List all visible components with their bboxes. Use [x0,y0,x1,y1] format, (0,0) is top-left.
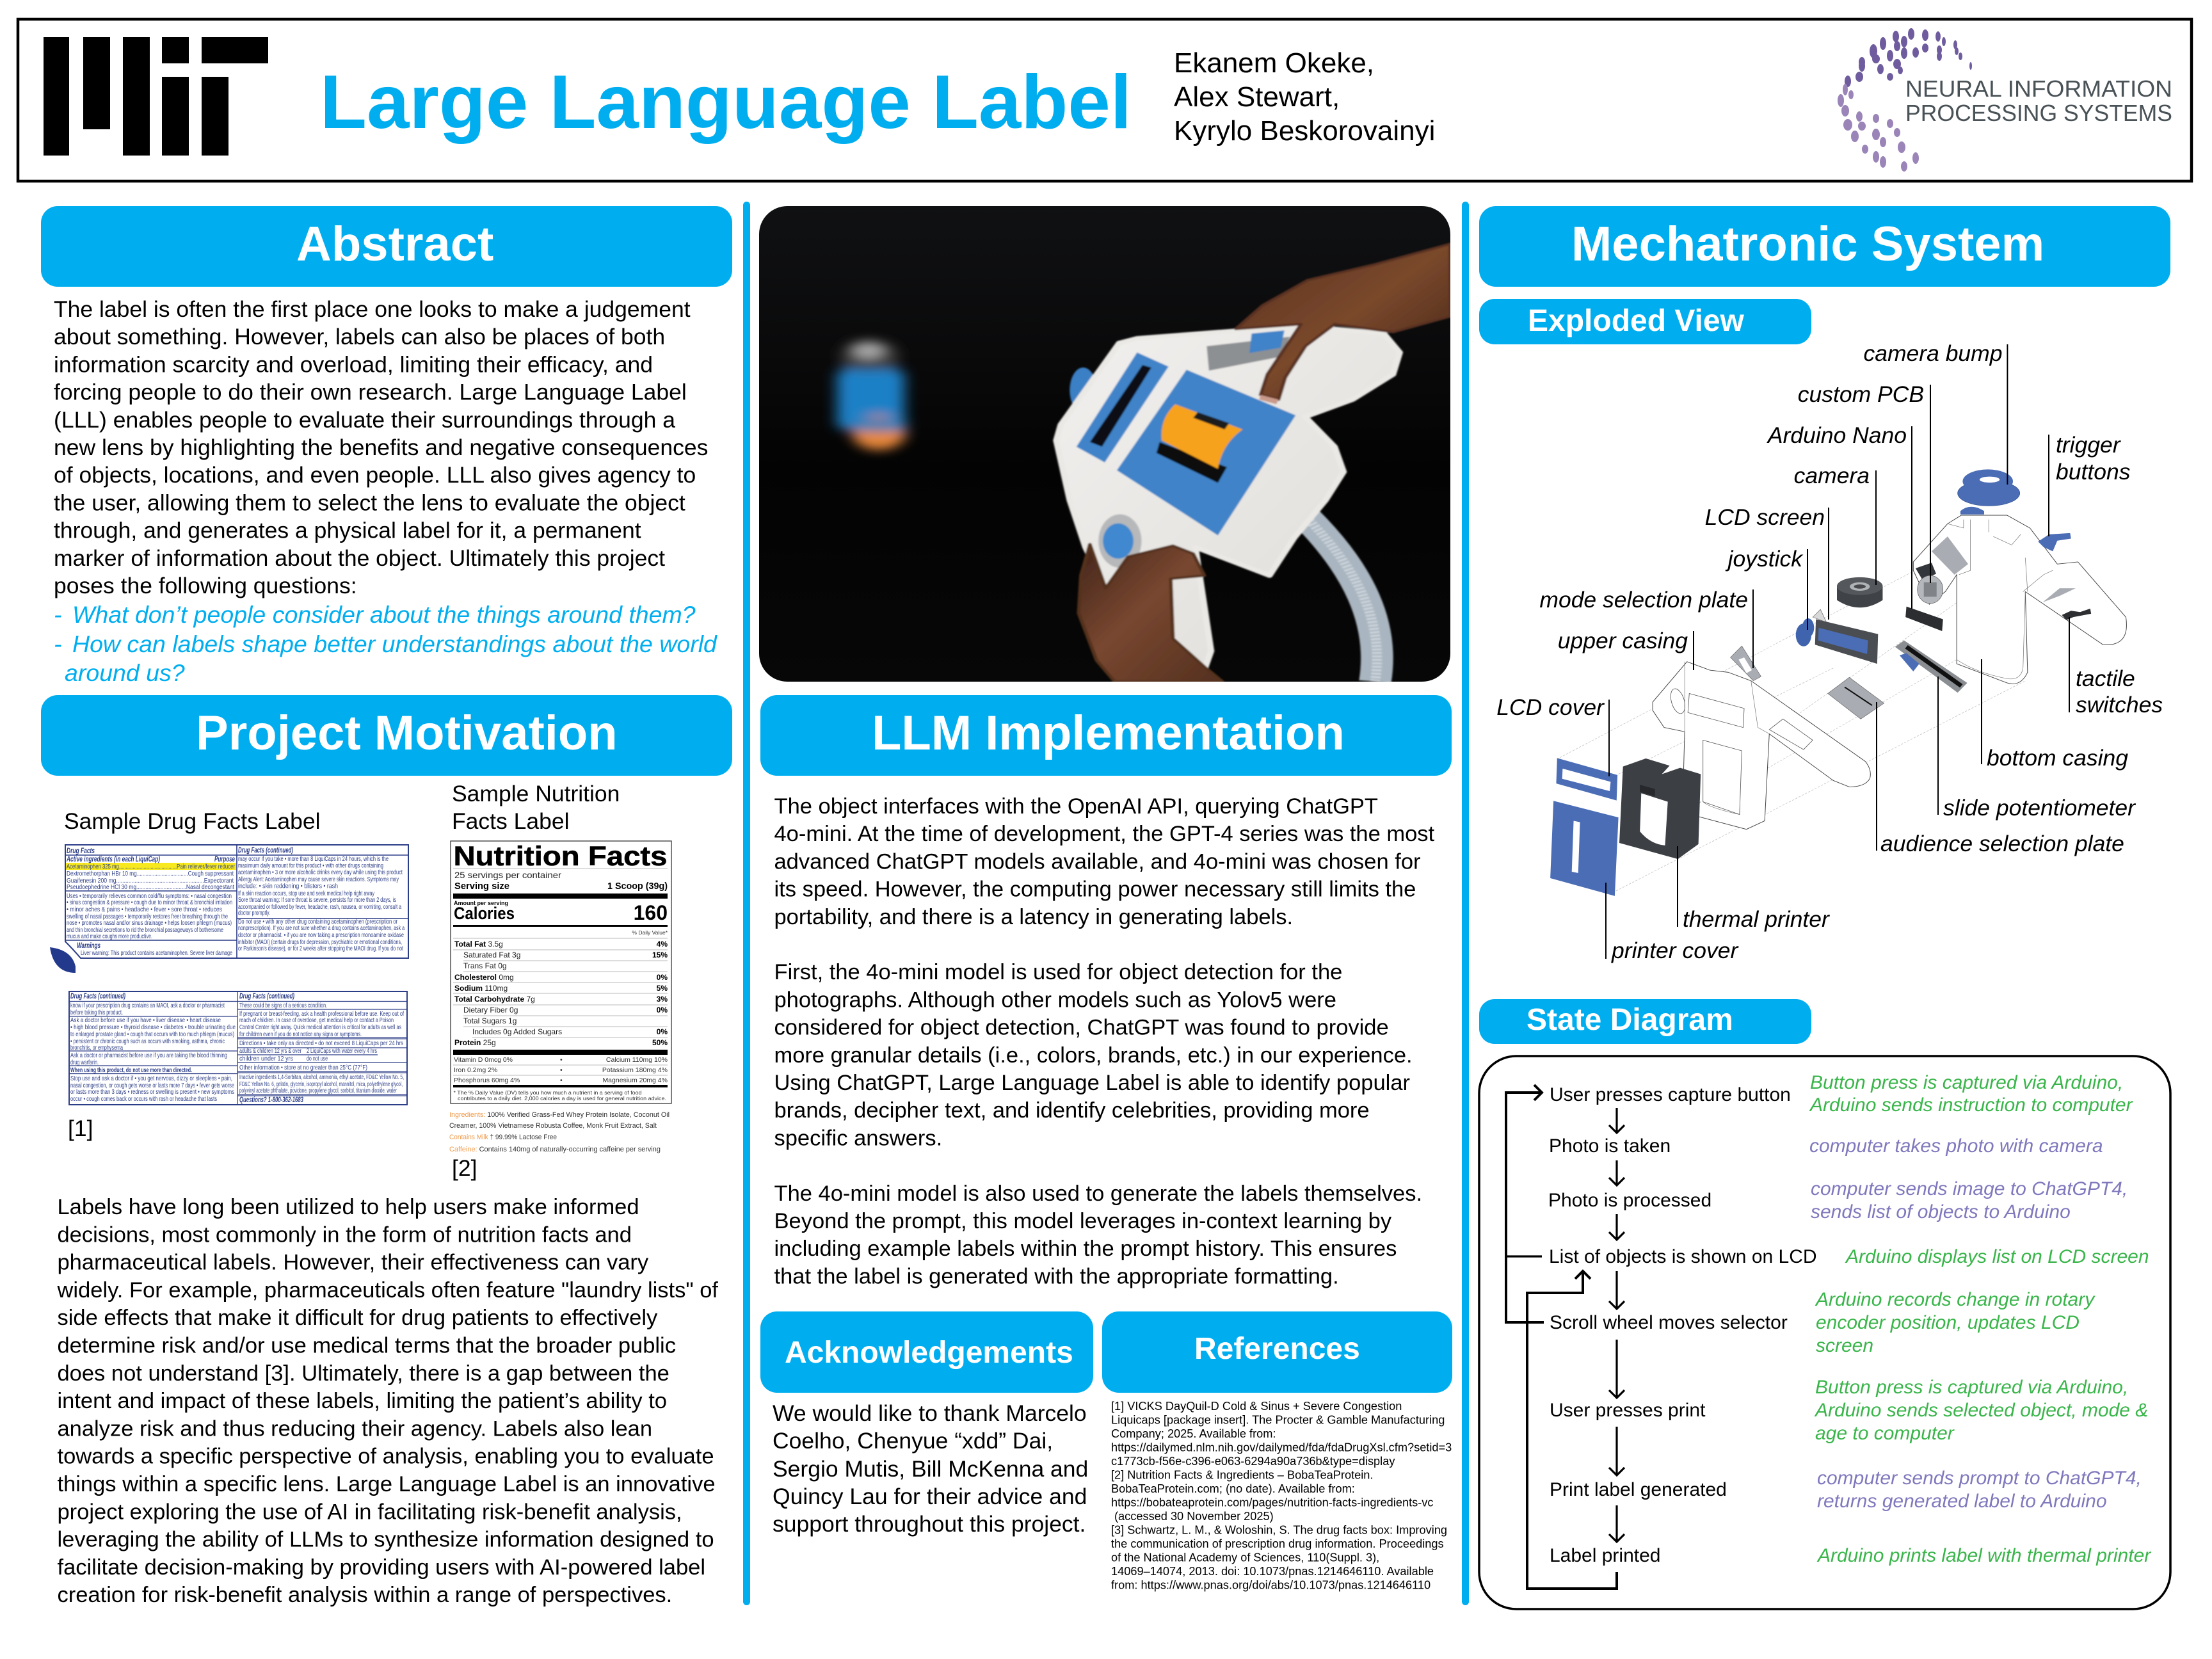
sample nutrition facts label: % Daily Value* [632,929,668,936]
heading: abstract: Abstract [296,217,493,271]
reference list: from: https://www.pnas.org/doi/abs/10.1073/pnas.1214646110 [1111,1578,1431,1591]
drug label sheet one: Drug Facts (continued) [238,846,293,854]
part labels: joystick [1726,546,1804,572]
motivation text: determine risk and/or use medical terms that the broader public [58,1334,676,1358]
state descriptions: screen [1816,1335,1873,1356]
state labels: Photo is processed [1548,1190,1711,1211]
state labels: Photo is taken [1549,1135,1671,1157]
part labels: camera [1794,463,1870,488]
motivation text [56,1195,718,1607]
drug label sheet one: inhibitor (MAOI) (certain drugs for depression, psychiatric or emotional conditions, [238,939,402,946]
sample nutrition facts label: 0% [657,1006,668,1014]
drug label sheet one: accompanied or followed by fever, headache, rash, nausea, or vomiting, consult a [238,904,401,911]
sample nutrition facts label: 4% [657,940,668,949]
sample nutrition facts label: Magnesium 20mg 4% [602,1077,668,1084]
sample nutrition facts label: 25 servings per container [454,870,561,880]
heading: mechatronic system: Mechatronic System [1571,217,2044,271]
sample nutrition facts label: • [560,1056,563,1064]
drug label sheet one: Guaifenesin 200 mg.........................................................Expectorant [67,878,234,885]
drug label sheet one [50,845,408,973]
panel: project motivation [41,695,732,1607]
state descriptions: Button press is captured via Arduino, [1810,1072,2123,1093]
NeurIPS logo [1838,28,2172,172]
drug label sheet two: Control Center right away. Quick medical attention is critical for adults as well as [239,1024,401,1031]
implementation text: The object interfaces with the OpenAI API, querying ChatGPT [774,794,1378,819]
acknowledgements text: support throughout this project. [773,1511,1086,1537]
custom PCB [1916,536,1968,604]
sample nutrition facts label: Total Carbohydrate 7g [454,995,535,1004]
motivation text: leveraging the ability of LLMs to synthesize information designed to [58,1528,714,1552]
drug label sheet two: to enlarged prostate gland • cough that occurs with too much phlegm (mucus) [70,1031,234,1038]
state descriptions: encoder position, updates LCD [1816,1312,2080,1333]
part labels: audience selection plate [1880,831,2124,856]
part labels: bottom casing [1987,745,2128,771]
drug label sheet two: Stop use and ask a doctor if • you get nervous, dizzy or sleepless • pain, [70,1075,232,1082]
part labels [1496,341,2163,963]
motivation text: widely. For example, pharmaceuticals often feature "laundry lists" of [56,1278,718,1302]
drug label sheet one: swelling of nasal passages • temporarily restores freer breathing through the [67,913,228,920]
sample nutrition facts label: • [560,1066,563,1074]
reference list: (accessed 30 November 2025) [1114,1510,1274,1523]
part labels: custom PCB [1798,381,1924,407]
drug label sheet one: Do not use • with any other drug containing acetaminophen (prescription or [238,918,397,926]
implementation text: First, the 4o-mini model is used for object detection for the [774,960,1342,984]
drug label sheet two: Other information • store at no greater than 25°C (77°F) [239,1064,367,1071]
citation 2: [2] [452,1155,477,1181]
sample nutrition facts label: 160 [634,901,668,924]
research questions: What don’t people consider about the things around them? [72,601,696,628]
sample nutrition facts label: Calories [454,904,515,923]
implementation text: its speed. However, the computing power necessary still limits the [774,878,1416,902]
sample nutrition facts label: Sodium 110mg [454,984,508,993]
heading: mechatronic system [1479,206,2170,287]
research questions: - [54,630,61,657]
sample nutrition facts label: Protein 25g [454,1038,496,1047]
implementation text: brands, decipher text, and identify celebrities, providing more [774,1098,1370,1123]
sample nutrition facts label: • [560,1077,563,1084]
panel: LLM implementation [760,695,1452,1288]
abstract text: poses the following questions: [54,573,357,598]
Arduino [1905,607,1943,631]
caption: nutrition facts [452,781,620,834]
reference list: c1773cb-f56e-c396-e063-6294a90a736b&type=display [1111,1455,1395,1468]
leader lines [1606,344,2069,959]
sample nutrition facts label: Total Fat 3.5g [454,940,503,949]
joystick [1796,609,1827,646]
drug label sheet one: If a skin reaction occurs, stop use and seek medical help right away [238,890,375,897]
state descriptions: returns generated label to Arduino [1817,1491,2107,1512]
implementation text: that the label is generated with the appropriate formatting. [774,1264,1339,1288]
LCD [1815,619,1878,664]
ingredients text: Ingredients: 100% Verified Grass-Fed Whey Protein Isolate, Coconut Oil [449,1111,669,1119]
ingredients text: Contains Milk † 99.99% Lactose Free [449,1134,557,1141]
ingredients text: Caffeine: Contains 140mg of naturally-occurring caffeine per serving [449,1146,661,1153]
reference list [1111,1400,1452,1591]
abstract text: information scarcity and overload, limiting their efficacy, and [54,351,653,377]
subheading: exploded view: Exploded View [1528,304,1745,338]
sample nutrition facts label: Includes 0g Added Sugars [472,1027,562,1036]
motivation text: Labels have long been utilized to help users make informed [58,1195,639,1219]
motivation text: decisions, most commonly in the form of nutrition facts and [58,1222,632,1247]
drug label sheet two: polyvinyl acetate phthalate, povidone, propylene glycol, sorbitol, titanium dioxide, water [239,1087,397,1094]
drug label sheet two: 2 LiquiCaps with water every 4 hrs [307,1048,377,1055]
ingredients text [449,1111,669,1153]
drug label sheet one: and thin bronchial secretions to rid the bronchial passageways of bothersome [67,927,223,934]
state descriptions: computer sends image to ChatGPT4, [1811,1178,2128,1199]
sample nutrition facts label: 0% [657,973,668,982]
column divider right [1462,202,1469,1605]
sample nutrition facts label: 1 Scoop (39g) [607,881,668,892]
part labels: camera bump [1863,341,2002,366]
state descriptions [1809,1072,2151,1566]
audience plate [1828,677,1884,719]
part labels: switches [2076,692,2163,717]
state arrows [1506,1085,1624,1589]
drug label sheet one: Dextromethorphan HBr 10 mg...................................Cough suppressant [67,870,234,878]
part labels: buttons [2056,459,2131,485]
heading: project motivation: Project Motivation [196,706,618,760]
device [1056,244,1450,682]
abstract text: marker of information about the object. Ultimately this project [54,545,665,571]
implementation text: Beyond the prompt, this model leverages in-context learning by [774,1209,1392,1233]
caption: nutrition facts: Facts Label [452,808,570,834]
heading: project motivation [41,695,732,776]
sample drug facts label [50,845,408,1105]
subheading: exploded view [1479,299,1811,344]
motivation text: things within a specific lens. Large Language Label is an innovative [58,1472,716,1496]
state labels: Label printed [1550,1545,1660,1566]
heading: abstract [41,206,732,287]
drug label sheet two: Inactive ingredients 1,4-Sorbitan, alcohol, ammonia, ethyl acetate, FD&C Yellow No. 5, [239,1074,404,1081]
motivation text: towards a specific perspective of analysis, enabling you to evaluate [58,1445,714,1469]
citation 1: [1] [68,1116,93,1141]
part labels: Arduino Nano [1767,422,1907,448]
drug label sheet two: reach of children. In case of overdose, get medical help or contact a Poison [239,1017,394,1024]
state descriptions: age to computer [1815,1423,1955,1444]
heading: references: References [1194,1332,1360,1366]
drug label sheet one: • sinus congestion & pressure • cough due to minor throat & bronchial irritation [67,899,232,906]
drug label sheet two: children under 12 yrs [239,1055,293,1062]
implementation text: Using ChatGPT, Large Language Label is able to identify popular [774,1071,1410,1095]
state descriptions: Arduino records change in rotary [1815,1289,2096,1310]
abstract text: (LLL) enables people to evaluate their surroundings through a [54,407,675,433]
sample nutrition facts label: Phosphorus 60mg 4% [454,1077,520,1084]
title: Large Language Label [320,60,1132,145]
motivation text: does not understand [3]. Ultimately, there is a gap between the [58,1361,669,1386]
sample nutrition facts label: Iron 0.2mg 2% [454,1066,497,1074]
NeurIPS logo: NEURAL INFORMATION [1905,76,2172,102]
drug label sheet two: These could be signs of a serious condition. [239,1002,327,1009]
heading: LLM implementation: LLM Implementation [872,706,1345,760]
MIT logo [44,37,268,156]
thermal printer [1619,758,1701,859]
reference list: https://dailymed.nlm.nih.gov/dailymed/fda/fdaDrugXsl.cfm?setid=3 [1111,1441,1452,1454]
sample nutrition facts label [449,841,671,1153]
abstract text [54,296,708,598]
research questions: around us? [65,659,185,686]
drug label sheet two: Directions • take only as directed • do not exceed 8 LiquiCaps per 24 hrs [239,1040,403,1047]
motivation text: project exploring the use of AI in facilitating risk-benefit analysis, [58,1500,682,1524]
drug label sheet one: Warnings [77,941,100,950]
reference list: of the National Academy of Sciences, 110(Suppl. 3), [1111,1551,1379,1564]
printer cover [1550,801,1619,896]
drug label sheet one: nonprescription). If you are not sure whether a drug contains acetaminophen, ask a [238,925,405,932]
drug label sheet one: Pseudoephedrine HCl 30 mg.................................Nasal decongestant [67,884,234,891]
LCD cover [1556,758,1617,801]
research questions: How can labels shape better understandings about the world [72,630,717,657]
motivation text: creation for risk-benefit analysis within a range of perspectives. [58,1583,672,1607]
drug label sheet two: FD&C Yellow No. 6, gelatin, glycerin, isopropyl alcohol, mannitol, mica, polyethylene glycol, [239,1081,403,1088]
drug label sheet one: Uses • temporarily relieves common cold/flu symptoms: • nasal congestion [67,893,232,900]
drug label sheet one: • minor aches & pains • headache • fever • sore throat • reduces [67,906,222,913]
drug label sheet two: nasal congestion, or cough gets worse or lasts more 7 days • fever gets worse [70,1082,234,1089]
subheading: state diagram [1479,999,1811,1044]
state descriptions: Button press is captured via Arduino, [1815,1377,2128,1398]
authors: Alex Stewart, [1174,81,1340,113]
abstract text: about something. However, labels can also be places of both [54,324,665,349]
state labels: User presses capture button [1550,1084,1791,1105]
blurred bottle [837,341,906,450]
mode plate [1731,646,1761,681]
drug label sheet two: bronchitis, or emphysema [70,1045,123,1052]
camera bump [1958,469,2020,515]
drug label sheet two: • persistent or chronic cough such as occurs with smoking, asthma, chronic [70,1038,225,1045]
reference list: the communication of prescription drug information. Proceedings [1111,1537,1444,1550]
drug label sheet one: Acetaminophen 325 mg..........................................Pain reliever/fever reducer [67,863,235,870]
drug label sheet two: occur • cough comes back or occurs with rash or headache that lasts [70,1096,217,1103]
implementation text: advanced ChatGPT models available, and 4o-mini was chosen for [774,849,1421,874]
drug label sheet one: doctor or pharmacist. • if you are now taking a prescription monoamine oxidase [238,932,404,939]
drug label sheet two: When using this product, do not use more than directed. [70,1067,192,1074]
exploded parts artwork [1550,469,2126,896]
state labels: User presses print [1550,1400,1706,1421]
product photograph [759,206,1450,682]
part labels: tactile [2076,666,2135,691]
motivation text: pharmaceutical labels. However, their effectiveness can vary [58,1251,649,1275]
drug label sheet two: do not use [307,1055,328,1062]
heading: references [1102,1311,1452,1393]
drug label sheet two: drug warfarin. [70,1059,99,1066]
state labels: Scroll wheel moves selector [1550,1312,1788,1333]
NeurIPS logo: PROCESSING SYSTEMS [1905,100,2172,126]
motivation text: facilitate decision-making by providing users with AI-powered label [58,1555,705,1580]
drug label sheet one: doctor promptly. [238,910,270,917]
acknowledgements text: Coelho, Chenyue “xdd” Dai, [773,1428,1053,1454]
reference list: [3] Schwartz, L. M., & Woloshin, S. The drug facts box: Improving [1111,1523,1447,1536]
abstract text: The label is often the first place one looks to make a judgement [54,296,691,322]
sample nutrition facts label: Amount per serving [454,900,508,906]
panel: acknowledgements [760,1311,1093,1537]
reference list: https://bobateaprotein.com/pages/nutrition-facts-ingredients-vc [1111,1496,1433,1509]
sample nutrition facts label: Serving size [454,881,509,892]
research questions [54,601,717,686]
state descriptions: sends list of objects to Arduino [1811,1201,2071,1222]
caption: drug facts: Sample Drug Facts Label [64,808,321,834]
abstract text: the user, allowing them to select the lens to evaluate the object [54,490,685,515]
sample nutrition facts label: Calcium 110mg 10% [606,1056,668,1064]
drug label sheet two: Drug Facts (continued) [239,991,294,1000]
sample nutrition facts label: Total Sugars 1g [463,1016,517,1025]
drug label sheet two: before taking this product. [70,1009,123,1016]
implementation text: 4o-mini. At the time of development, the GPT-4 series was the most [774,822,1435,846]
abstract text: forcing people to do their own research. Large Language Label [54,380,687,405]
drug label sheet one: or Parkinson’s disease), or for 2 weeks after stopping the MAOI drug. If you do not [238,945,403,952]
abstract text: through, and generates a physical label for it, a permanent [54,518,641,543]
implementation text: specific answers. [774,1126,942,1150]
implementation text: photographs. Although other models such as Yolov5 were [774,988,1336,1012]
state descriptions: Arduino sends selected object, mode & [1814,1400,2148,1421]
sample nutrition facts label: Nutrition Facts [453,841,667,872]
implementation text: considered for object detection, ChatGPT was found to provide [774,1016,1389,1040]
implementation text: portability, and there is a latency in generating labels. [774,905,1293,929]
reference list: Company; 2025. Available from: [1111,1427,1276,1440]
panel: references [1102,1311,1452,1591]
state descriptions: Arduino displays list on LCD screen [1845,1246,2149,1267]
part labels: slide potentiometer [1943,795,2136,821]
implementation text: including example labels within the prompt history. This ensures [774,1237,1397,1261]
drug label sheet one: Drug Facts [67,846,95,855]
heading: acknowledgements [760,1311,1093,1393]
reference list: [2] Nutrition Facts & Ingredients – BobaTeaProtein. [1111,1468,1373,1481]
drug label sheet two: If pregnant or breast-feeding, ask a health professional before use. Keep out of [239,1011,404,1018]
part labels: upper casing [1558,628,1688,653]
drug label sheet two: Questions? 1-800-362-1683 [239,1095,303,1104]
upper casing [1653,662,1870,830]
exploded view diagram [1496,341,2163,963]
sample nutrition facts label: 15% [652,950,668,959]
sample nutrition facts label: 50% [652,1038,668,1047]
sample nutrition facts label: 3% [657,995,668,1004]
state labels [1548,1084,1817,1566]
drug label sheet one: may occur if you take • more than 8 LiquiCaps in 24 hours, which is the [238,856,389,863]
reference list: 14069–14074, 2013. doi: 10.1073/pnas.1214646110. Available [1111,1565,1434,1578]
panel: abstract [41,206,732,686]
column divider left [743,202,750,1605]
drug label sheet one: acetaminophen • 3 or more alcoholic drinks every day while using this product [238,869,403,876]
drug label sheet one: Purpose [214,854,235,863]
header banner [18,19,2192,181]
acknowledgements text: We would like to thank Marcelo [773,1400,1087,1426]
sample nutrition facts label: 0% [657,1027,668,1036]
sample nutrition facts label: Potassium 180mg 4% [602,1066,668,1074]
drug label sheet two: for children even if you do not notice any signs or symptoms. [239,1031,362,1038]
authors [1174,47,1435,147]
slide potentiometer [1895,641,1968,693]
drug label sheet two: Ask a doctor before use if you have • liver disease • heart disease [70,1017,221,1024]
subheading: state diagram: State Diagram [1527,1003,1733,1037]
sample nutrition facts label: Saturated Fat 3g [463,950,520,959]
implementation text: The 4o-mini model is also used to generate the labels themselves. [774,1182,1422,1206]
drug label sheet two: or lasts more than 3 days • redness or swelling is present • new symptoms [70,1089,234,1096]
reference list: Liquicaps [package insert]. The Procter & Gamble Manufacturing [1111,1413,1445,1426]
implementation text [774,794,1435,1288]
drug label sheet one: Sore throat warning: If sore throat is severe, persists for more than 2 days, is [238,897,396,904]
drug label sheet two [69,991,407,1105]
state diagram [1479,1056,2170,1609]
motivation text: intent and impact of these labels, limiting the patient’s ability to [58,1389,667,1413]
sample nutrition facts label: Vitamin D 0mcg 0% [454,1056,513,1064]
drug label sheet two: Drug Facts (continued) [70,991,125,1000]
acknowledgements text: Sergio Mutis, Bill McKenna and [773,1456,1088,1482]
drug label sheet one: Allergy Alert: Acetaminophen may cause severe skin reactions. Symptoms may [238,876,399,883]
motivation text: analyze risk and thus reducing their agency. Labels also lean [58,1416,652,1441]
authors: Ekanem Okeke, [1174,47,1374,79]
part labels: thermal printer [1683,906,1831,932]
abstract text: new lens by highlighting the benefits and negative consequences [54,435,708,460]
state descriptions: Arduino prints label with thermal printer [1816,1545,2151,1566]
implementation text: more granular details (i.e., colors, brands, etc.) in our experience. [774,1043,1413,1068]
acknowledgements text: Quincy Lau for their advice and [773,1484,1087,1509]
acknowledgements text [773,1400,1088,1537]
abstract text: of objects, locations, and even people. LLL also gives agency to [54,462,696,488]
part labels: printer cover [1611,938,1739,963]
state labels: Print label generated [1550,1479,1727,1500]
part labels: trigger [2056,432,2122,458]
drug label sheet one: include: • skin reddening • blisters • rash [238,883,338,890]
tactile switches [2042,588,2091,620]
motivation text: side effects that make it difficult for drug patients to effectively [58,1306,658,1330]
state descriptions: computer takes photo with camera [1809,1135,2103,1157]
drug label sheet one: Active ingredients (in each LiquiCap) [66,854,160,863]
part labels: mode selection plate [1539,587,1748,613]
state descriptions: Arduino sends instruction to computer [1809,1094,2133,1116]
drug label sheet one: mucus and make coughs more productive. [67,933,152,940]
sample nutrition facts label: * The % Daily Value (DV) tells you how much a nutrient in a serving of food [453,1089,642,1096]
part labels: LCD screen [1705,504,1825,530]
research questions: - [54,601,61,628]
reference list: [1] VICKS DayQuil-D Cold & Sinus + Severe Congestion [1111,1400,1402,1413]
heading: acknowledgements: Acknowledgements [785,1336,1073,1370]
sample nutrition facts label: Trans Fat 0g [463,961,507,970]
part labels: LCD cover [1496,694,1605,720]
sample nutrition facts label: Dietary Fiber 0g [463,1006,518,1014]
panel: mechatronic system [1479,206,2170,1609]
sample nutrition facts label: contributes to a daily diet. 2,000 calories a day is used for general nutrition advice. [458,1095,666,1102]
drug label sheet two: Ask a doctor or pharmacist before use if you are taking the blood thinning [70,1052,227,1059]
hands [1236,244,1450,399]
reference list: BobaTeaProtein.com; (no date). Available from: [1111,1482,1355,1495]
caption: nutrition facts: Sample Nutrition [452,781,620,806]
drug label sheet one: Liver warning: This product contains acetaminophen. Severe liver damage [81,950,232,957]
trigger buttons [2038,533,2071,551]
drug label sheet two: • high blood pressure • thyroid disease • diabetes • trouble urinating due [70,1024,236,1031]
bottom casing [1913,515,2126,684]
ingredients text: Creamer, 100% Vietnamese Robusta Coffee, Monk Fruit Extract, Salt [449,1122,657,1130]
drug label sheet two: adults & children 12 yrs & over [239,1048,301,1055]
camera [1837,577,1882,607]
heading: LLM implementation [760,695,1452,776]
authors: Kyrylo Beskorovainyi [1174,115,1435,147]
drug label sheet two: know if your prescription drug contains an MAOI, ask a doctor or pharmacist [70,1002,225,1009]
sample nutrition facts label: Cholesterol 0mg [454,973,514,982]
state descriptions: computer sends prompt to ChatGPT4, [1817,1468,2142,1489]
state labels: List of objects is shown on LCD [1549,1246,1817,1267]
drug label sheet one: maximum daily amount for this product • with other drugs containing [238,863,383,869]
drug label sheet one: nose • promotes nasal and/or sinus drainage • helps loosen phlegm (mucus) [67,920,232,927]
sample nutrition facts label: 5% [657,984,668,993]
